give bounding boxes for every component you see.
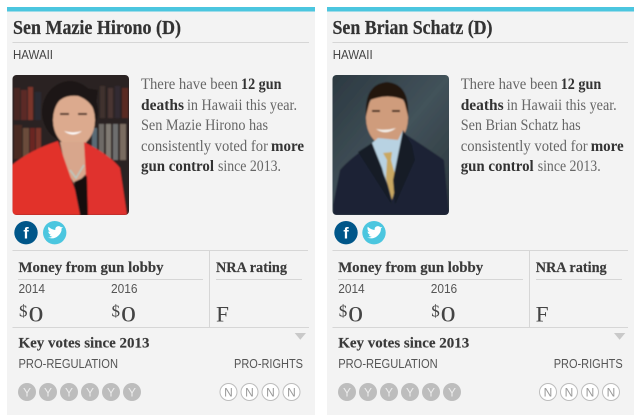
yes votes: Y xyxy=(364,385,372,399)
heading: money from gun lobby: Money from gun lobby xyxy=(18,260,164,276)
heading: senator name: Sen Mazie Hirono (D) xyxy=(13,18,181,39)
body text: gun control xyxy=(461,158,534,175)
body text: in Hawaii this year. xyxy=(187,97,297,114)
heading: NRA rating: NRA rating xyxy=(216,260,287,276)
photo: Mazie Hirono portrait xyxy=(10,73,132,218)
yes votes: Y xyxy=(343,385,351,399)
money 2014: 2014 xyxy=(18,281,45,296)
body text: 12 gun xyxy=(561,76,602,93)
no votes: N xyxy=(544,385,552,399)
yes votes: Y xyxy=(107,385,115,399)
yes votes: Y xyxy=(23,385,31,399)
money 2014 xyxy=(338,281,365,327)
icon: facebook xyxy=(14,221,38,244)
body text: consistently voted for xyxy=(141,138,269,155)
heading: senator name: Sen Brian Schatz (D) xyxy=(332,18,492,39)
body text: There have been xyxy=(141,76,238,93)
body text: Sen Brian Schatz has xyxy=(461,117,581,134)
yes votes: Y xyxy=(86,385,94,399)
no votes: N xyxy=(565,385,573,399)
state label: HAWAII xyxy=(13,48,53,62)
icon: facebook: f xyxy=(343,226,349,242)
money 2014 xyxy=(18,281,45,327)
money 2014: $ xyxy=(339,302,347,320)
NRA grade: F xyxy=(216,302,229,327)
money 2014: $ xyxy=(19,302,28,320)
NRA grade: F xyxy=(536,302,549,327)
no votes: N xyxy=(287,385,296,399)
label: pro-regulation: PRO-REGULATION xyxy=(18,356,118,371)
money 2014: 0 xyxy=(348,302,363,327)
money 2016 xyxy=(111,281,138,327)
money 2016: 2016 xyxy=(431,281,457,296)
state label: HAWAII xyxy=(333,48,373,62)
body text: gun control xyxy=(141,158,215,175)
yes votes: Y xyxy=(385,385,393,399)
body text: deaths xyxy=(461,97,504,114)
body text: 12 gun xyxy=(241,76,282,93)
money 2016 xyxy=(431,281,457,327)
money 2016: $ xyxy=(112,302,120,320)
body text: more xyxy=(271,138,304,155)
no votes xyxy=(540,384,620,400)
label: pro-regulation: PRO-REGULATION xyxy=(338,356,438,371)
money 2014: 0 xyxy=(28,302,44,327)
label: pro-rights: PRO-RIGHTS xyxy=(554,356,623,371)
money 2016: 0 xyxy=(121,302,136,327)
yes votes xyxy=(338,383,461,401)
photo: Brian Schatz portrait xyxy=(330,73,452,218)
yes votes: Y xyxy=(448,385,456,399)
heading: key votes: Key votes since 2013 xyxy=(18,336,150,352)
no votes: N xyxy=(224,385,233,399)
panel: Sen Brian Schatz xyxy=(327,7,634,415)
icon: twitter xyxy=(43,221,66,244)
body text: There have been xyxy=(461,76,558,93)
yes votes xyxy=(18,383,141,401)
money 2014: 2014 xyxy=(338,281,365,296)
no votes: N xyxy=(586,385,594,399)
yes votes: Y xyxy=(128,385,136,399)
heading: key votes: Key votes since 2013 xyxy=(338,336,469,352)
no votes: N xyxy=(607,385,615,399)
body text: deaths xyxy=(141,97,184,114)
yes votes: Y xyxy=(65,385,73,399)
body text: Sen Mazie Hirono has xyxy=(141,117,268,134)
icon: facebook xyxy=(334,221,358,244)
icon: dropdown arrow xyxy=(295,333,306,340)
yes votes: Y xyxy=(406,385,414,399)
no votes: N xyxy=(245,385,254,399)
body text: consistently voted for xyxy=(461,138,588,155)
label: pro-rights: PRO-RIGHTS xyxy=(234,356,303,371)
heading: NRA rating: NRA rating xyxy=(536,260,607,276)
icon: dropdown arrow xyxy=(614,333,625,340)
body text: more xyxy=(591,138,624,155)
panel: Sen Mazie Hirono xyxy=(7,7,315,415)
icon: twitter xyxy=(362,221,386,244)
no votes: N xyxy=(266,385,275,399)
icon: facebook: f xyxy=(23,226,29,242)
body text: since 2013. xyxy=(538,158,601,175)
money 2016: $ xyxy=(431,302,440,320)
yes votes: Y xyxy=(427,385,435,399)
money 2016: 0 xyxy=(441,302,456,327)
body text: in Hawaii this year. xyxy=(507,97,617,114)
no votes xyxy=(220,384,300,400)
yes votes: Y xyxy=(44,385,52,399)
money 2016: 2016 xyxy=(111,281,138,296)
heading: money from gun lobby: Money from gun lobby xyxy=(338,260,484,276)
body text: since 2013. xyxy=(218,158,281,175)
